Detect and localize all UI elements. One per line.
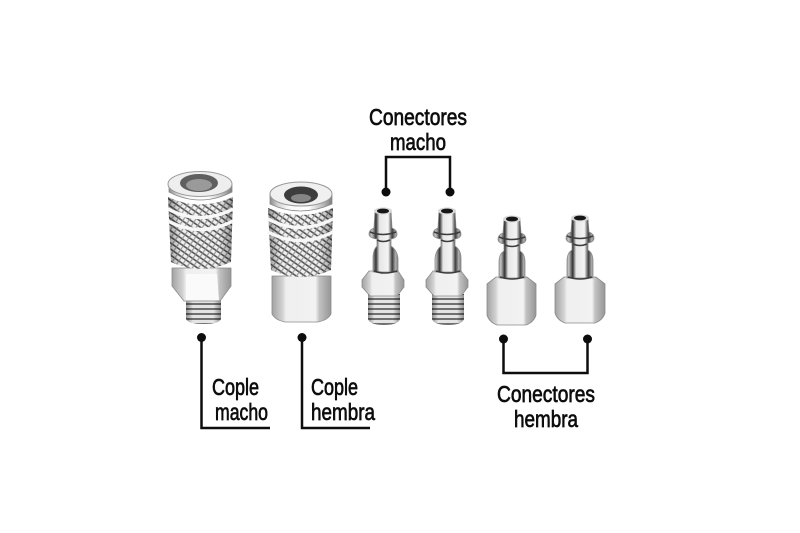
connector: conector hembra 1 bbox=[487, 216, 536, 325]
callout: conectores macho: macho bbox=[390, 129, 446, 155]
callout: cople hembra: hembra bbox=[311, 399, 376, 425]
callout: cople hembra bbox=[298, 333, 376, 428]
callout: cople macho: Cople bbox=[212, 374, 259, 400]
callout: cople hembra: Cople bbox=[311, 374, 358, 400]
callout: cople macho bbox=[197, 333, 270, 428]
coupler: cople hembra bbox=[268, 182, 333, 322]
callout: conectores macho: Conectores bbox=[369, 104, 467, 130]
callout: conectores hembra: Conectores bbox=[497, 381, 595, 407]
coupler: cople macho bbox=[168, 172, 233, 324]
callout: conectores hembra bbox=[497, 334, 595, 432]
callout: conectores macho bbox=[369, 104, 467, 196]
connector: conector macho 1 bbox=[362, 208, 404, 325]
callout: conectores hembra: hembra bbox=[514, 406, 579, 432]
connector: conector macho 2 bbox=[426, 208, 468, 325]
callout: cople macho: macho bbox=[215, 399, 268, 425]
connector: conector hembra 2 bbox=[555, 214, 605, 323]
